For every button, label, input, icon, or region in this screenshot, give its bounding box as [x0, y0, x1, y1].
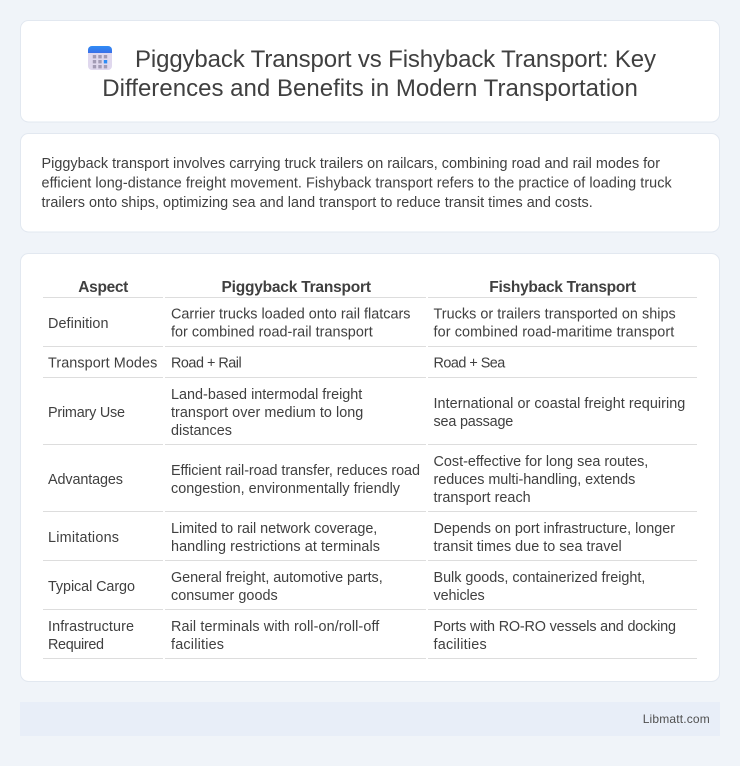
table row: Primary Use: International or coastal freight requiring [434, 396, 685, 412]
table row: Primary Use: transport over medium to long [171, 405, 363, 421]
table header row: Fishyback Transport [489, 279, 636, 296]
table row: Definition: Definition [48, 316, 108, 332]
text block: introduction paragraph [42, 156, 672, 211]
table header row: Aspect [78, 279, 128, 296]
table row: Infrastructure Required [43, 619, 697, 659]
table row: Advantages: transport reach [434, 490, 531, 506]
table row: Definition: for combined road-rail transport [171, 324, 373, 340]
table row: Limitations: Limitations [48, 530, 119, 546]
table row: Limitations: handling restrictions at terminals [171, 539, 380, 555]
table row: Infrastructure Required: facilities [171, 637, 224, 653]
table row: Typical Cargo: General freight, automotive parts, [171, 570, 383, 586]
table row: Infrastructure Required: Rail terminals with roll-on/roll-off [171, 619, 380, 635]
table row: Typical Cargo: Typical Cargo [48, 579, 135, 595]
table row: Primary Use: sea passage [434, 414, 513, 430]
text block: introduction paragraph: trailers onto ships, optimizing sea and land transport to reduce transit times and costs. [42, 195, 593, 211]
table row: Limitations: Limited to rail network coverage, [171, 521, 377, 537]
table header row [43, 279, 697, 298]
table row: Infrastructure Required: Ports with RO-RO vessels and docking [434, 619, 676, 635]
table row: Limitations: transit times due to sea travel [434, 539, 622, 555]
table row: Primary Use: distances [171, 423, 232, 439]
table row: Typical Cargo [43, 570, 697, 610]
table row: Primary Use [43, 387, 697, 445]
table row: Transport Modes: Transport Modes [48, 356, 157, 372]
table row: Infrastructure Required: facilities [434, 637, 487, 653]
table row: Advantages: Efficient rail-road transfer, reduces road [171, 463, 420, 479]
table row: Transport Modes: Road + Sea [434, 356, 505, 372]
footer [20, 702, 720, 736]
table row: Typical Cargo: vehicles [434, 588, 485, 604]
table row: Transport Modes: Road + Rail [171, 356, 242, 372]
table row: Definition: Trucks or trailers transported on ships [434, 306, 676, 322]
table row: Limitations [43, 521, 697, 561]
table row: Advantages [43, 454, 697, 512]
table row: Infrastructure Required: Required [48, 637, 104, 653]
title [102, 46, 656, 102]
table row: Definition: Carrier trucks loaded onto rail flatcars [171, 306, 410, 322]
panel: introduction [20, 134, 720, 232]
panel: title header [20, 20, 720, 122]
table row: Transport Modes [43, 356, 697, 378]
text block: introduction paragraph: Piggyback transport involves carrying truck trailers on railcars, combining road and rail modes for [42, 156, 660, 172]
table row: Primary Use: Land-based intermodal freight [171, 387, 362, 403]
table row: Infrastructure Required: Infrastructure [48, 619, 134, 635]
table row: Advantages: reduces multi-handling, extends [434, 472, 635, 488]
table row: Advantages: congestion, environmentally friendly [171, 481, 401, 497]
table row: Limitations: Depends on port infrastructure, longer [434, 521, 675, 537]
table row: Definition: for combined road-maritime transport [434, 324, 674, 340]
table row: Definition [43, 306, 697, 347]
table row: Typical Cargo: consumer goods [171, 588, 278, 604]
panel: comparison table [20, 254, 720, 682]
title: Piggyback Transport vs Fishyback Transport: Key [135, 46, 656, 73]
text block: introduction paragraph: efficient long-distance freight movement. Fishyback transport refers to the practice of loading truck [42, 176, 672, 192]
table header row: Piggyback Transport [222, 279, 371, 296]
table row: Primary Use: Primary Use [48, 405, 125, 421]
footer: Libmatt.com [643, 712, 710, 726]
icon: calendar [88, 46, 112, 70]
table row: Advantages: Cost-effective for long sea routes, [434, 454, 648, 470]
title: Differences and Benefits in Modern Transportation [102, 75, 638, 102]
table row: Advantages: Advantages [48, 472, 123, 488]
table row: Typical Cargo: Bulk goods, containerized freight, [434, 570, 645, 586]
